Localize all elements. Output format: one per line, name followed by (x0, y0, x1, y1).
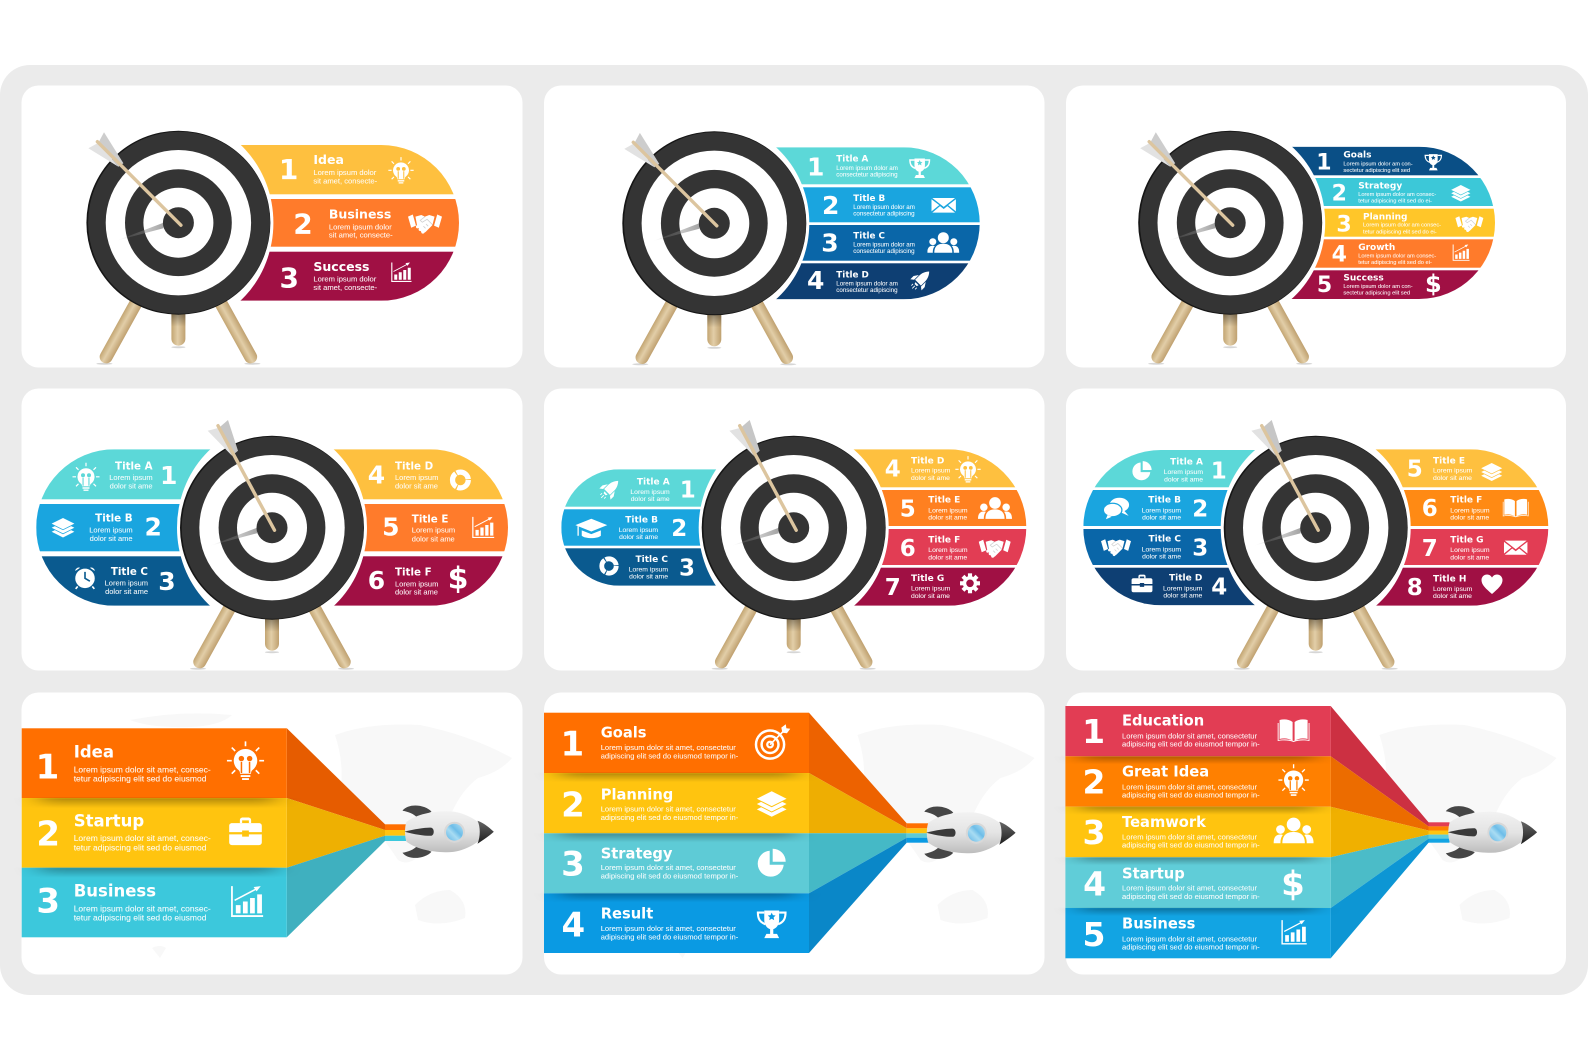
option 2: Great Idea: adipiscing elit sed do eiusmod tempor in- (1122, 791, 1260, 800)
icon: trophy (910, 159, 929, 178)
icon: people (1274, 818, 1314, 843)
option 2: Title B: Lorem ipsum dolor am (853, 204, 915, 211)
option 7: Title G: 7 (1422, 536, 1438, 562)
option 2: Title B (1083, 490, 1238, 526)
option 7: Title G: Lorem ipsum (911, 586, 951, 593)
option 2: Great Idea: Great Idea (1122, 764, 1209, 781)
option 3: Title C: Title C (1149, 535, 1181, 545)
option 4: Title D: dolor sit ame (1163, 593, 1203, 600)
option 2: Title B: Title B (95, 513, 133, 525)
panel: target with 3 options (22, 86, 522, 368)
target with arrow (86, 131, 270, 366)
icon: handshake (979, 540, 1011, 558)
option 1: Goals: sectetur adipiscing elit sed (1343, 168, 1410, 174)
option 4: Startup (1065, 857, 1331, 908)
option 2: Title B: Lorem ipsum (619, 527, 658, 534)
option 1: Idea: Idea (74, 742, 114, 761)
option 1: Title A: Title A (637, 477, 670, 487)
option 5: Title E (1372, 449, 1549, 487)
option 5: Success: Success (1343, 274, 1384, 284)
option 1: Title A: Title A (836, 155, 869, 165)
option 7: Title G (850, 568, 1027, 606)
option 1: Title A: Lorem ipsum (630, 489, 670, 496)
option 6: Title F: 6 (1422, 496, 1438, 522)
icon: open book (1503, 499, 1529, 517)
panel: target with 5 options (1066, 86, 1566, 368)
option 5: Business: Lorem ipsum dolor sit amet, consectetur (1122, 934, 1258, 943)
option 8: Title H: Title H (1433, 574, 1466, 584)
option 2: Title B: 2 (144, 513, 162, 542)
option 3: Title C: 3 (1192, 536, 1208, 562)
option 4: Title D: Lorem ipsum (911, 468, 951, 475)
option 2: Planning: Lorem ipsum dolor sit amet, consectetur (601, 805, 736, 814)
option 4: Title D (1090, 568, 1260, 605)
option 1: Idea: tetur adipiscing elit sed do eiusmod (74, 774, 207, 784)
option 6: Title F: 6 (900, 536, 916, 562)
rocket (402, 806, 494, 858)
option 4: Startup: adipiscing elit sed do eiusmod tempor in- (1122, 892, 1260, 901)
option 4: Growth: 4 (1332, 242, 1347, 267)
option 4: Title D (850, 449, 1027, 487)
icon: light bulb (72, 463, 100, 491)
option 3: Success: Success (313, 259, 369, 274)
option 5: Title E: dolor sit ame (928, 514, 967, 521)
option 1: Title A: Lorem ipsum (1164, 469, 1203, 476)
icon: handshake (408, 214, 442, 234)
icon: briefcase (1132, 575, 1152, 592)
option 2: Great Idea: 2 (1083, 763, 1105, 802)
panel: target with 7 options (544, 388, 1044, 671)
option 6: Title F: 6 (368, 566, 385, 595)
option 5: Success: Lorem ipsum dolor am con- (1343, 284, 1413, 290)
option 2: Title B: 2 (1192, 497, 1208, 523)
option 2: Planning: Planning (601, 786, 673, 803)
option 1: Title A (40, 449, 212, 499)
option 1: Education: adipiscing elit sed do eiusmod tempor in- (1122, 740, 1260, 749)
option 3: Success: Lorem ipsum dolor (313, 275, 377, 284)
option 6: Title F: Lorem ipsum (1450, 508, 1490, 515)
option 2: Title B: 2 (822, 191, 839, 220)
option 1: Education: 1 (1082, 712, 1105, 751)
option 5: Title E: 5 (382, 513, 400, 542)
option 1: Goals: adipiscing elit sed do eiusmod tempor in- (601, 751, 739, 760)
option 2: Strategy: Strategy (1358, 181, 1402, 191)
option 4: Title D: 4 (885, 457, 901, 483)
option 1: Title A: dolor sit ame (110, 481, 153, 490)
icon: pie chart (758, 849, 786, 877)
option 5: Business: adipiscing elit sed do eiusmod tempor in- (1122, 943, 1260, 952)
option 4: Title D: dolor sit ame (911, 475, 950, 482)
icon: briefcase (229, 818, 262, 845)
option 6: Title F (1392, 490, 1549, 526)
option 3: Title C: dolor sit ame (105, 587, 148, 596)
funnel side faces (1331, 706, 1450, 958)
option 4: Title D: Title D (911, 456, 944, 466)
icon: layers (1451, 185, 1470, 202)
option 3: Business: Business (74, 882, 156, 901)
option 2: Startup: Lorem ipsum dolor sit amet, consec- (74, 833, 211, 843)
rocket (1446, 806, 1537, 858)
icon: layers (1481, 463, 1502, 481)
option 4: Title D: consectetur adipiscing (836, 287, 898, 294)
option 1: Title A: 1 (1211, 458, 1227, 484)
option 1: Idea: 1 (36, 747, 59, 787)
option 2: Strategy (1305, 178, 1495, 206)
option 6: Title F: Lorem ipsum (395, 579, 438, 588)
target with arrow (1224, 420, 1408, 671)
option 1: Idea (236, 145, 459, 194)
option 3: Title C: Title C (636, 555, 668, 565)
option 4: Startup: Lorem ipsum dolor sit amet, consectetur (1122, 884, 1258, 893)
option 6: Title F: Title F (928, 535, 960, 545)
icon: people (927, 232, 959, 253)
option 5: Business: Business (1122, 915, 1196, 932)
option 4: Result: Lorem ipsum dolor sit amet, consectetur (601, 924, 736, 933)
option 8: Title H (1372, 568, 1549, 606)
option 5: Success (1292, 270, 1478, 299)
panel: rocket with 3 options (22, 692, 522, 974)
option 7: Title G: dolor sit ame (1450, 554, 1489, 561)
option 3: Success: sit amet, consecte- (313, 283, 378, 292)
option 3: Title C (40, 556, 212, 606)
option 2: Title B: Lorem ipsum (89, 526, 133, 535)
option 8: Title H: 8 (1407, 575, 1423, 601)
option 8: Title H: dolor sit ame (1433, 593, 1472, 600)
icon: gear (960, 573, 980, 593)
option 3: Business: Lorem ipsum dolor sit amet, consec- (74, 903, 211, 913)
option 5: Title E: dolor sit ame (412, 535, 455, 544)
option 3: Teamwork: 3 (1083, 813, 1105, 852)
option 2: Business: Business (329, 207, 391, 222)
option 2: Title B (561, 509, 702, 546)
option 2: Startup (22, 798, 287, 868)
icon: donut cycle (453, 472, 468, 488)
option 4: Result: Result (601, 906, 653, 923)
option 4: Startup: Startup (1122, 865, 1185, 882)
panel: target with 8 options (1066, 388, 1566, 671)
option 2: Business (258, 199, 459, 247)
option 1: Goals (544, 713, 809, 773)
option 1: Title A (565, 469, 720, 507)
option 1: Education (1065, 706, 1331, 756)
option 2: Strategy: 2 (1332, 181, 1347, 206)
option 3: Strategy: Lorem ipsum dolor sit amet, consectetur (601, 863, 736, 872)
option 1: Idea (22, 728, 287, 798)
option 3: Title C: Lorem ipsum (629, 566, 668, 573)
icon: bar chart (231, 886, 263, 917)
option 5: Title E (352, 504, 508, 551)
option 2: Great Idea (1065, 756, 1331, 807)
option 1: Title A: Lorem ipsum (109, 473, 153, 482)
option 1: Title A: 1 (680, 478, 696, 504)
option 5: Title E: Title E (928, 496, 960, 506)
option 3: Teamwork: Lorem ipsum dolor sit amet, consectetur (1122, 833, 1258, 842)
option 7: Title G (1392, 529, 1549, 565)
icon: chat bubbles (1103, 498, 1129, 519)
option 5: Title E (870, 490, 1027, 526)
option 3: Planning: tetur adipiscing elit sed do ei- (1363, 229, 1437, 235)
option 2: Strategy: Lorem ipsum dolor am consec- (1358, 192, 1436, 198)
option 4: Title D: 4 (1211, 574, 1227, 600)
option 2: Great Idea: Lorem ipsum dolor sit amet, consectetur (1122, 783, 1258, 792)
option 1: Title A: consectetur adipiscing (836, 172, 898, 179)
funnel side faces (287, 728, 406, 937)
option 4: Title D: Title D (836, 271, 869, 281)
option 4: Title D: Lorem ipsum (395, 473, 438, 482)
target with arrow (180, 420, 364, 671)
option 3: Business: tetur adipiscing elit sed do eiusmod (74, 913, 207, 923)
option 3: Title C: Title C (853, 231, 885, 241)
panel: target with 4 options (544, 86, 1044, 368)
option 3: Business (22, 868, 287, 937)
option 1: Title A: Title A (115, 460, 153, 472)
option 3: Title C (795, 225, 980, 261)
option 4: Result: adipiscing elit sed do eiusmod tempor in- (601, 932, 739, 941)
option 1: Idea: Lorem ipsum dolor (313, 168, 377, 177)
icon: rocket (596, 475, 624, 503)
option 6: Title F: dolor sit ame (1450, 515, 1489, 522)
icon: people (978, 497, 1012, 519)
icon: bar chart (391, 262, 412, 282)
option 2: Title B: Title B (1148, 496, 1181, 506)
option 3: Title C (1083, 529, 1238, 565)
option 4: Growth: Growth (1358, 243, 1395, 253)
option 3: Title C: Lorem ipsum (105, 579, 148, 588)
icon: dollar: $ (1281, 865, 1305, 905)
option 2: Title B: dolor sit ame (90, 534, 133, 543)
option 4: Title D (330, 449, 508, 499)
option 2: Business: 2 (293, 208, 313, 240)
option 4: Growth: tetur adipiscing elit sed do ei- (1358, 260, 1432, 266)
icon: donut cycle (602, 559, 616, 573)
icon: layers (52, 518, 74, 537)
option 3: Title C: 3 (821, 229, 839, 258)
option 4: Title D: dolor sit ame (395, 481, 438, 490)
option 6: Title F (870, 529, 1027, 565)
option 4: Title D: Title D (1169, 573, 1202, 583)
option 6: Title F: Title F (395, 567, 432, 579)
target with arrow (622, 131, 806, 366)
option 2: Strategy: tetur adipiscing elit sed do ei- (1358, 199, 1432, 205)
option 3: Title C: 3 (679, 556, 695, 582)
option 4: Result: 4 (561, 906, 585, 946)
option 7: Title G: Title G (1450, 535, 1484, 545)
option 3: Planning: 3 (1336, 212, 1352, 237)
option 7: Title G: 7 (885, 575, 901, 601)
option 8: Title H: Lorem ipsum (1433, 586, 1473, 593)
option 3: Business: 3 (36, 881, 60, 921)
option 5: Title E: 5 (1407, 457, 1423, 483)
option 2: Title B: Title B (625, 515, 658, 525)
option 3: Strategy: Strategy (601, 845, 673, 862)
option 3: Teamwork: Teamwork (1122, 814, 1207, 831)
option 4: Title D: Title D (395, 460, 434, 472)
option 4: Startup: 4 (1083, 864, 1106, 903)
option 2: Title B: Title B (853, 194, 886, 204)
option 1: Title A: 1 (807, 153, 824, 182)
icon: target with arrow (756, 724, 790, 759)
icon: dollar: $ (1425, 270, 1442, 298)
icon: bar chart (472, 517, 494, 538)
option 6: Title F: Title F (1450, 496, 1482, 506)
icon: handshake (1101, 539, 1131, 556)
option 3: Title C: Lorem ipsum dolor am (853, 241, 915, 248)
option 1: Title A: Lorem ipsum dolor am (836, 165, 898, 172)
option 6: Title F: dolor sit ame (928, 554, 967, 561)
icon: trophy (1425, 154, 1441, 170)
option 2: Business: Lorem ipsum dolor (329, 222, 392, 231)
icon: light bulb (955, 456, 981, 483)
option 1: Title A: Title A (1170, 457, 1203, 467)
option 2: Title B: 2 (671, 516, 687, 542)
option 2: Title B: Lorem ipsum (1142, 508, 1181, 515)
option 1: Goals (1292, 146, 1478, 176)
option 3: Teamwork: adipiscing elit sed do eiusmod tempor in- (1122, 841, 1260, 850)
option 5: Title E: Lorem ipsum (1433, 468, 1473, 475)
option 2: Title B: dolor sit ame (1142, 515, 1181, 522)
option 2: Title B: dolor sit ame (619, 534, 658, 541)
icon: open book (1278, 719, 1310, 742)
option 4: Growth: Lorem ipsum dolor am consec- (1358, 253, 1436, 259)
icon: light bulb (227, 741, 264, 780)
option 6: Title F: dolor sit ame (395, 588, 438, 597)
option 5: Success: sectetur adipiscing elit sed (1343, 291, 1410, 297)
option 4: Title D: 4 (368, 460, 385, 489)
option 3: Success: 3 (280, 262, 299, 294)
option 2: Title B: consectetur adipiscing (853, 211, 915, 218)
option 2: Title B (795, 187, 980, 222)
option 3: Strategy (544, 833, 809, 893)
option 1: Education: Lorem ipsum dolor sit amet, consectetur (1122, 732, 1258, 741)
option 1: Goals: Lorem ipsum dolor am con- (1343, 161, 1413, 167)
target with arrow (702, 420, 886, 671)
option 1: Title A: dolor sit ame (631, 496, 670, 503)
option 3: Planning (1315, 209, 1495, 237)
option 2: Business: sit amet, consecte- (329, 231, 393, 240)
option 7: Title G: Title G (911, 574, 944, 584)
option 2: Planning: adipiscing elit sed do eiusmod tempor in- (601, 813, 739, 822)
option 1: Goals: 1 (560, 725, 584, 765)
option 1: Title A (770, 147, 980, 184)
option 3: Title C: consectetur adipiscing (853, 248, 915, 255)
option 1: Goals: Goals (1343, 151, 1371, 161)
option 5: Title E: Title E (1433, 456, 1465, 466)
icon: light bulb (1278, 764, 1309, 796)
option 3: Strategy: adipiscing elit sed do eiusmod tempor in- (601, 872, 739, 881)
option 3: Title C: 3 (158, 567, 176, 596)
panel: target with 6 options (22, 388, 522, 671)
icon: dollar: $ (448, 562, 468, 596)
option 1: Idea: Idea (313, 152, 344, 167)
option 5: Title E: Lorem ipsum (928, 508, 968, 515)
option 3: Success (236, 252, 459, 301)
option 5: Title E: 5 (900, 497, 916, 523)
option 2: Startup: Startup (74, 812, 144, 831)
option 3: Title C: dolor sit ame (1142, 554, 1181, 561)
option 4: Result (544, 893, 809, 953)
option 2: Planning: 2 (561, 786, 585, 826)
option 6: Title F (330, 556, 508, 606)
option 5: Title E: Lorem ipsum (412, 526, 455, 535)
option 3: Title C: dolor sit ame (629, 574, 668, 581)
option 2: Startup: tetur adipiscing elit sed do eiusmod (74, 842, 207, 852)
panel: rocket with 4 options (544, 692, 1044, 974)
icon: bar chart (1281, 920, 1307, 945)
option 3: Title C: Title C (111, 566, 148, 578)
option 5: Business: 5 (1083, 915, 1105, 954)
funnel side faces (809, 713, 929, 953)
option 4: Title D: 4 (807, 266, 824, 295)
option 1: Title A: dolor sit ame (1164, 476, 1203, 483)
option 3: Planning: Planning (1363, 212, 1408, 222)
option 5: Title E: Title E (412, 513, 448, 525)
icon: envelope (1504, 541, 1527, 555)
target with arrow (1138, 131, 1322, 366)
option 4: Growth (1305, 239, 1495, 268)
option 2: Title B (36, 504, 191, 551)
option 1: Idea: sit amet, consecte- (313, 176, 378, 185)
icon: light bulb (388, 157, 414, 184)
option 5: Business (1065, 908, 1331, 958)
icon: envelope (932, 198, 956, 213)
option 3: Title C: Lorem ipsum (1142, 546, 1181, 553)
option 1: Goals: Goals (601, 725, 647, 742)
panel: rocket with 5 options (1065, 692, 1566, 974)
option 1: Idea: 1 (279, 153, 298, 186)
option 1: Title A (1090, 450, 1260, 487)
option 7: Title G: Lorem ipsum (1450, 547, 1490, 554)
rocket (924, 807, 1016, 859)
option 2: Planning (544, 773, 809, 833)
icon: heart (1482, 575, 1502, 594)
icon: layers (757, 791, 787, 817)
option 2: Startup: 2 (36, 815, 60, 855)
option 1: Goals: Lorem ipsum dolor sit amet, consectetur (601, 743, 736, 752)
option 4: Title D: Lorem ipsum dolor am (836, 281, 898, 288)
option 3: Title C (565, 548, 720, 586)
icon: alarm clock (75, 568, 95, 589)
option 1: Education: Education (1122, 713, 1204, 730)
option 5: Success: 5 (1317, 273, 1332, 298)
option 7: Title G: dolor sit ame (911, 593, 950, 600)
option 3: Strategy: 3 (561, 845, 585, 885)
icon: bar chart (1453, 245, 1470, 261)
option 5: Title E: dolor sit ame (1433, 475, 1472, 482)
option 3: Teamwork (1065, 807, 1331, 857)
option 3: Planning: Lorem ipsum dolor am consec- (1363, 223, 1441, 229)
icon: pie chart (1132, 461, 1152, 480)
option 4: Title D: Lorem ipsum (1163, 585, 1203, 592)
icon: handshake (1455, 216, 1483, 232)
icon: rocket (907, 266, 935, 294)
icon: graduation cap (575, 519, 607, 538)
option 4: Title D (770, 263, 980, 299)
option 1: Title A: 1 (160, 461, 177, 490)
option 6: Title F: Lorem ipsum (928, 547, 968, 554)
icon: trophy (758, 910, 786, 938)
option 1: Idea: Lorem ipsum dolor sit amet, consec- (74, 764, 211, 774)
option 1: Goals: 1 (1316, 151, 1332, 176)
